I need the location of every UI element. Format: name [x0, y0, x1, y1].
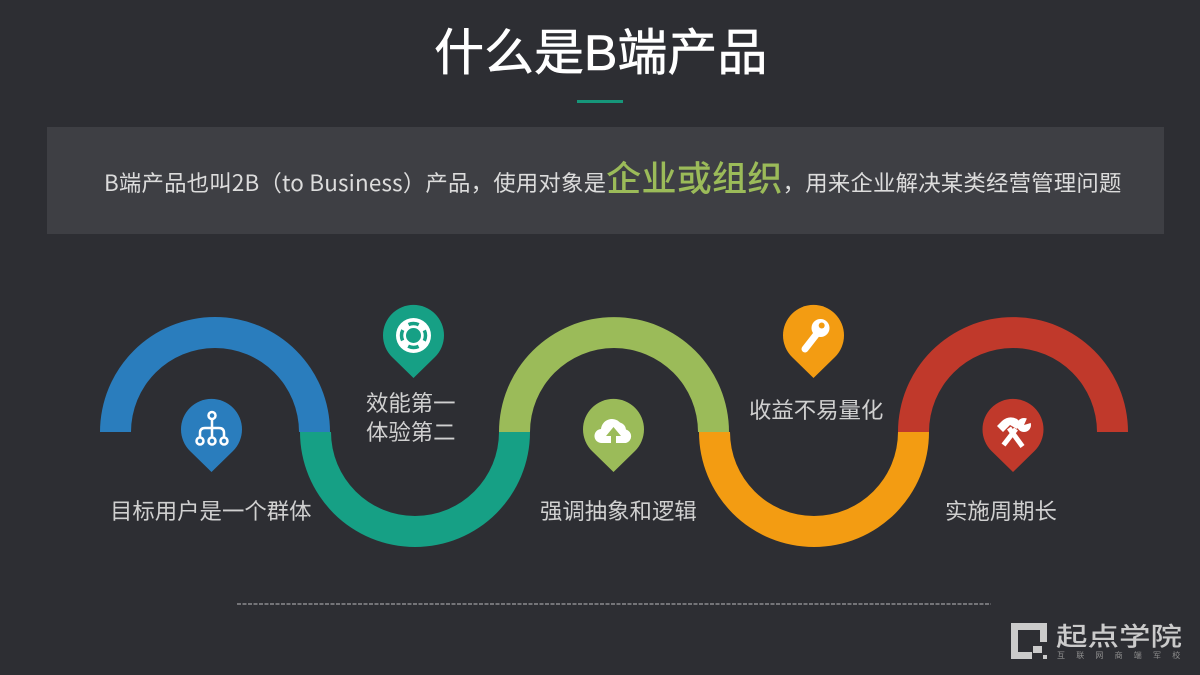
icon: lifebuoy	[396, 318, 431, 353]
panel: definition	[47, 127, 1164, 234]
pin: red tools	[982, 399, 1044, 472]
label: target users: 目标用户是一个群体	[110, 494, 312, 526]
label: efficiency first: 效能第一	[366, 386, 456, 418]
arc: green	[499, 317, 729, 432]
icon: cloud upload	[594, 419, 631, 444]
label: abstraction and logic: 强调抽象和逻辑	[540, 494, 697, 526]
label: efficiency first	[366, 386, 456, 447]
dotted divider	[237, 603, 991, 605]
label: long implementation: 实施周期长	[945, 494, 1057, 526]
icon: hammer and wrench	[997, 416, 1034, 446]
arc: red	[898, 317, 1128, 432]
pin: orange key	[783, 305, 844, 378]
label: hard to quantify: 收益不易量化	[749, 393, 883, 425]
title: 什么是B端产品	[434, 25, 767, 81]
icon: key	[805, 319, 830, 349]
definition text: B端产品也叫2B（to Business）产品，使用对象是企业或组织，用来企业解决某类经营管理问题	[104, 151, 1122, 202]
icon: hierarchy	[196, 412, 228, 444]
title underline	[577, 100, 623, 103]
pin: teal lifebuoy	[383, 305, 444, 378]
label: efficiency first: 体验第二	[366, 415, 456, 447]
pin: green cloud	[583, 399, 644, 472]
arc: blue	[100, 317, 330, 432]
pin: blue hierarchy	[181, 399, 242, 472]
logo text: 起点学院	[1056, 616, 1182, 654]
arc: teal	[300, 432, 530, 547]
logo mark	[1011, 623, 1047, 659]
logo subtitle: 互联网商端军校	[1057, 650, 1191, 661]
arc: orange	[699, 432, 929, 547]
